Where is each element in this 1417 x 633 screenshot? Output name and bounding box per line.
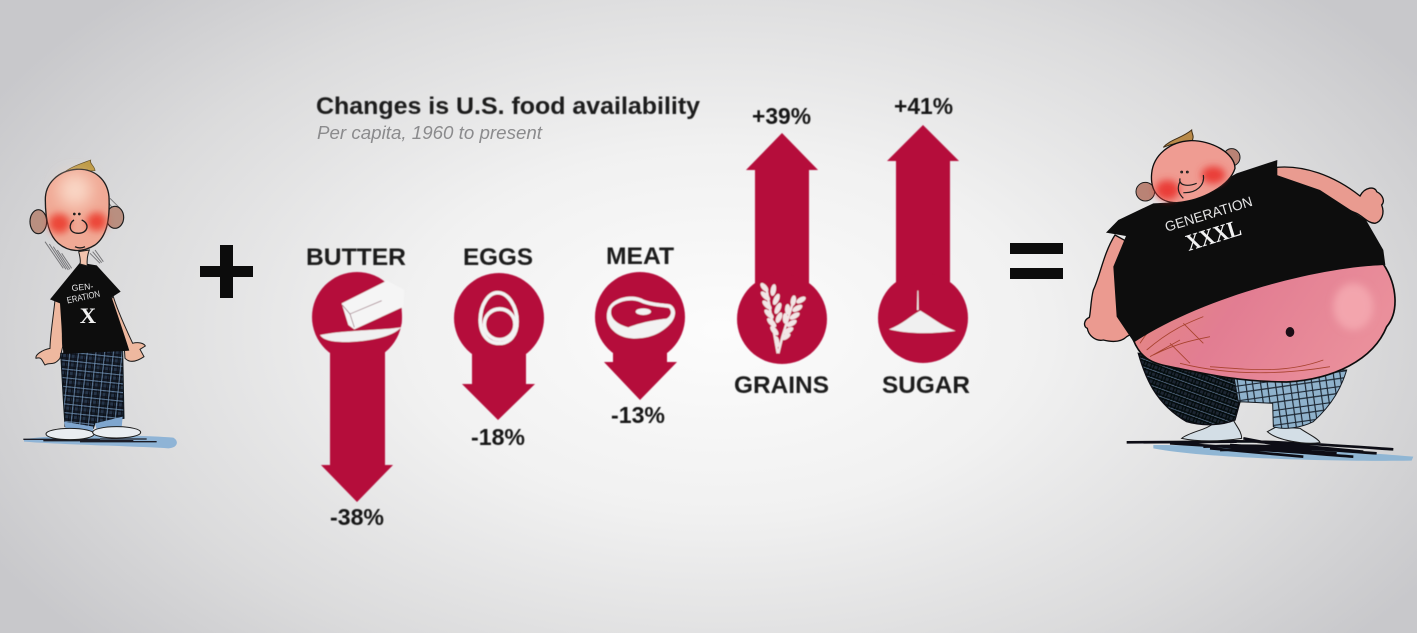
item: eggs (454, 244, 544, 450)
item: butter (306, 244, 406, 530)
sugar value: +41% (894, 93, 953, 119)
meat circle (595, 272, 685, 362)
item: grains (734, 103, 829, 399)
shoes (46, 427, 141, 440)
butter label: BUTTER (306, 244, 406, 271)
eggs value: -18% (471, 424, 525, 450)
butter circle (312, 272, 402, 362)
head (1151, 141, 1235, 203)
belly shading (1140, 283, 1373, 373)
black T-shirt (50, 263, 129, 354)
item: meat (595, 243, 685, 428)
shoes (1182, 420, 1320, 443)
shirt text: GEN- (71, 281, 94, 293)
highlight on forehead (58, 173, 92, 207)
ground shadow (23, 435, 177, 448)
shirt text: XXXL (1183, 215, 1245, 257)
butter value: -38% (330, 504, 384, 530)
item: sugar (878, 93, 970, 399)
shirt text: ERATION (66, 288, 101, 306)
ears (30, 206, 124, 234)
trousers: light side (1233, 370, 1347, 428)
hair (1163, 130, 1193, 147)
eggs circle (454, 273, 544, 363)
grains value: +39% (752, 103, 811, 129)
eggs down arrow (462, 345, 535, 420)
icon: steak (607, 297, 675, 338)
icon: egg (480, 293, 517, 343)
sugar up arrow (887, 125, 959, 295)
butter down arrow (321, 340, 393, 502)
right arm and hand (1277, 167, 1383, 223)
shirt text (66, 281, 101, 328)
face details (70, 213, 87, 248)
plaid trousers (61, 349, 124, 428)
black T-shirt (1106, 160, 1385, 342)
shirt text (1163, 193, 1254, 257)
illustration: Generation XXXL man (1085, 130, 1413, 461)
trouser cuffs (64, 417, 123, 433)
left arm and hand (1085, 235, 1135, 341)
cheeks and shading (49, 212, 107, 233)
sugar circle (878, 273, 968, 363)
head (45, 169, 109, 250)
neck (79, 250, 89, 266)
cheeks (1155, 166, 1225, 200)
hair (65, 160, 95, 172)
eggs label: EGGS (463, 244, 533, 271)
right arm (110, 297, 145, 361)
neck hatching (45, 198, 120, 270)
shirt text: X (80, 303, 97, 328)
shirt text: GENERATION (1163, 193, 1254, 235)
meat value: -13% (611, 402, 665, 428)
face details (1178, 171, 1204, 198)
plus sign (200, 245, 253, 298)
meat label: MEAT (606, 243, 674, 270)
ears (1136, 149, 1240, 201)
trousers: dark side (1138, 353, 1257, 425)
grains label: GRAINS (734, 372, 829, 399)
equals sign (1010, 243, 1063, 279)
chart title: Changes is U.S. food availability (316, 93, 701, 120)
grains up arrow (746, 133, 818, 295)
belly (1133, 264, 1395, 382)
left arm (36, 300, 63, 365)
meat down arrow (604, 345, 677, 400)
ground shadow (1127, 438, 1413, 461)
icon: wheat (759, 282, 807, 353)
navel (1286, 327, 1294, 337)
icon: butter dish (320, 281, 404, 342)
grains circle (737, 274, 827, 364)
icon: sugar pile (889, 291, 956, 333)
chart subtitle: Per capita, 1960 to present (317, 123, 543, 143)
illustration: Generation X boy (23, 160, 177, 448)
sugar label: SUGAR (882, 372, 970, 399)
